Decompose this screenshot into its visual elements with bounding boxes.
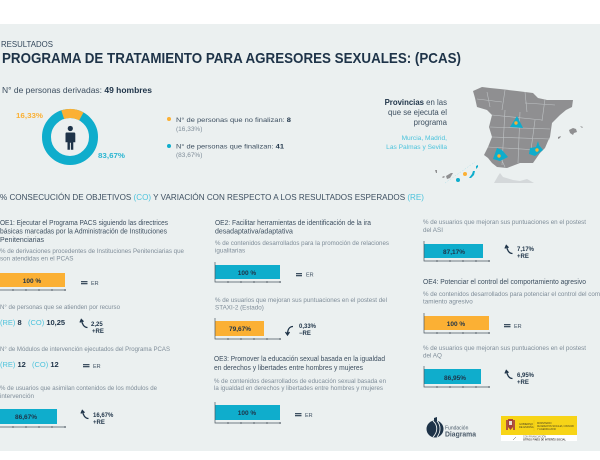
logo: Gobierno de España: OTROS FINES DE INTERÉS SOCIAL bbox=[523, 436, 566, 442]
status: equals ER: ER bbox=[306, 272, 314, 278]
variation: +7.17% bbox=[505, 246, 535, 260]
indicator text: aggression control bbox=[423, 291, 600, 306]
variation: -0.33%: 0,33% bbox=[299, 324, 317, 330]
legend: N° de personas que no finalizan: 8 bbox=[176, 116, 291, 124]
legend bbox=[167, 116, 291, 159]
indicator text: assimilate contents: % de usuarios que asimilan contenidos de los módulos de bbox=[0, 385, 157, 392]
indicator text: sexual education: la igualdad en derechos y libertades entre hombres y mujeres bbox=[214, 385, 383, 392]
status: equals ER bbox=[83, 364, 101, 370]
values: RE 8, CO 10.25: (CO) bbox=[28, 318, 45, 327]
provinces text: programa bbox=[414, 118, 448, 127]
provinces text: Provincias en las bbox=[385, 98, 447, 107]
icon: person bbox=[65, 126, 75, 150]
indicator text: STAXI-2: % de usuarios que mejoran sus puntuaciones en el postest del bbox=[215, 297, 387, 304]
bar: derivations 100% bbox=[0, 273, 66, 291]
bar: assimilate 86.67% bbox=[0, 409, 66, 428]
provinces text: Murcia, Madrid, bbox=[402, 135, 447, 142]
values: RE 12, CO 12: (CO) bbox=[32, 360, 49, 369]
provinces text bbox=[385, 98, 448, 151]
mountain silhouette bbox=[494, 173, 534, 183]
variation: +7.17%: +RE bbox=[517, 254, 529, 260]
indicator text: assimilate contents bbox=[0, 385, 157, 400]
Canary islands bbox=[435, 162, 478, 183]
objective OE3 heading: en derechos y libertades entre hombres y mujeres bbox=[214, 365, 363, 372]
logo: Fundación Diagrama bbox=[426, 417, 476, 438]
logo: Gobierno de España: DE ESPAÑA bbox=[519, 424, 534, 429]
status: equals ER: ER bbox=[93, 364, 101, 370]
objective OE2 heading: OE2: Facilitar herramientas de identificación de la ira bbox=[215, 220, 371, 227]
bar: STAXI-2 79.67% bbox=[215, 318, 281, 340]
objective OE2 heading bbox=[215, 220, 371, 236]
indicator text: assimilate contents: intervención bbox=[0, 393, 34, 400]
variation: +2.25 bbox=[80, 320, 104, 335]
bar: equal relations 100% bbox=[215, 262, 281, 283]
variation: -0.33% bbox=[286, 324, 317, 337]
donut label: finishing: 83,67% bbox=[98, 153, 126, 160]
legend: (16,33%) bbox=[176, 126, 202, 133]
indicator text: ASI bbox=[423, 219, 586, 234]
values: RE 8, CO 10.25: 10,25 bbox=[46, 318, 65, 327]
bar: AQ 86.95%: 86,95% bbox=[444, 375, 466, 382]
indicator text: aggression control: % de contenidos desarrollados para potenciar el control del com bbox=[423, 291, 600, 298]
indicator text: modules executed: N° de Módulos de intervención ejecutados del Programa PCAS bbox=[0, 345, 170, 353]
bar: assimilate 86.67%: 86,67% bbox=[15, 414, 37, 421]
variation: +16.67%: +RE bbox=[93, 420, 105, 426]
variation: +2.25: +RE bbox=[92, 329, 104, 335]
variation: +6.95%: 6,95% bbox=[517, 373, 535, 379]
highlighted province: Murcia bbox=[529, 141, 543, 156]
provinces text: que se ejecuta el bbox=[388, 108, 447, 117]
provinces text: Las Palmas y Sevilla bbox=[386, 144, 447, 151]
indicator text: sexual education bbox=[214, 378, 386, 392]
bar: STAXI-2 79.67%: 79,67% bbox=[229, 326, 251, 333]
objective OE1 heading bbox=[0, 220, 168, 244]
values: RE 8, CO 10.25: (RE) 8 bbox=[0, 318, 22, 327]
bar: derivations 100%: 100 % bbox=[23, 278, 41, 285]
indicator text: AQ: % de usuarios que mejoran sus puntuaciones en el postest bbox=[423, 345, 586, 352]
panel: column 3 bbox=[423, 219, 600, 388]
status: equals ER: ER bbox=[305, 413, 313, 419]
logo: Gobierno de España: CON FINANCIACIÓN bbox=[523, 436, 546, 438]
referred people count: N° de personas derivadas: 49 hombres bbox=[2, 86, 153, 95]
logo: Fundación Diagrama: Fundación bbox=[445, 426, 469, 432]
variation: +16.67%: 16,67% bbox=[93, 413, 114, 419]
title: PROGRAMA DE TRATAMIENTO PARA AGRESORES SEXUALES: (PCAS) bbox=[2, 50, 461, 67]
objective OE1 heading: Penitenciarias bbox=[0, 237, 44, 244]
panel: column 1 bbox=[0, 220, 184, 428]
section label: RESULTADOS bbox=[1, 39, 53, 49]
variation: +16.67% bbox=[81, 410, 114, 426]
indicator text: ASI: del ASI bbox=[423, 227, 443, 234]
bar: AQ 86.95% bbox=[424, 366, 490, 388]
variation: +7.17%: 7,17% bbox=[517, 247, 535, 253]
legend: (83,67%) bbox=[176, 152, 202, 159]
values: RE 12, CO 12: 12 bbox=[50, 360, 59, 369]
indicator text: derivations bbox=[0, 248, 184, 262]
indicator text: equal relations bbox=[215, 240, 389, 254]
indicator text: STAXI-2 bbox=[215, 297, 387, 312]
logo: Gobierno de España: GOBIERNO bbox=[519, 422, 533, 426]
highlighted province: Madrid bbox=[510, 116, 523, 128]
indicator text: people per resource: N° de personas que se atienden por recurso bbox=[0, 303, 120, 311]
bar: equal relations 100%: 100 % bbox=[238, 270, 256, 277]
status: equals ER bbox=[504, 324, 522, 330]
donut chart bbox=[16, 113, 126, 160]
indicator text: derivations: % de derivaciones procedentes de Instituciones Penitenciarias que bbox=[0, 248, 184, 255]
bar: sexual education 100% bbox=[215, 402, 281, 424]
legend: N° de personas que finalizan: 41 bbox=[176, 142, 284, 150]
logo: Fundación Diagrama: Diagrama bbox=[445, 432, 476, 438]
indicator text: equal relations: igualitarias bbox=[215, 248, 245, 254]
objective OE3 heading: OE3: Promover la educación sexual basada en la igualdad bbox=[214, 356, 385, 363]
status: equals ER: ER bbox=[514, 324, 522, 330]
bar: ASI 87.17% bbox=[424, 241, 490, 262]
section heading: % CONSECUCIÓN DE OBJETIVOS (CO) Y VARIACIÓN CON RESPECTO A LOS RESULTADOS ESPERADOS (RE) bbox=[0, 192, 424, 202]
variation: -0.33%: −RE bbox=[299, 331, 311, 337]
indicator text: STAXI-2: STAXI-2 (Estado) bbox=[215, 304, 264, 312]
highlighted province: Sevilla bbox=[493, 148, 508, 161]
indicator text: AQ bbox=[423, 345, 586, 360]
indicator text: ASI: % de usuarios que mejoran sus puntuaciones en el postest bbox=[423, 219, 586, 226]
objective OE2 heading: desadaptativa/adaptativa bbox=[215, 228, 293, 236]
logo: Gobierno de España: DE DERECHOS SOCIALES, CONSUMO bbox=[537, 425, 574, 428]
variation: +6.95%: +RE bbox=[517, 380, 529, 386]
bar: sexual education 100%: 100 % bbox=[238, 410, 256, 417]
map of Spain bbox=[435, 87, 583, 183]
logo: Gobierno de España: Y AGENDA 2030 bbox=[537, 428, 556, 431]
objective OE3 heading bbox=[214, 356, 385, 372]
status: equals ER bbox=[81, 281, 99, 287]
indicator text: aggression control: tamiento agresivo bbox=[423, 298, 473, 306]
variation: +2.25: 2,25 bbox=[91, 322, 103, 328]
bar: aggression control 100% bbox=[424, 313, 490, 334]
variation: +6.95% bbox=[505, 370, 535, 386]
logo: Gobierno de España bbox=[501, 416, 577, 442]
bar: aggression control 100%: 100 % bbox=[447, 321, 465, 328]
icon: coat of arms bbox=[506, 419, 515, 430]
indicator text: sexual education: % de contenidos desarrollados de educación sexual basada en bbox=[214, 378, 386, 385]
status: equals ER bbox=[296, 272, 314, 278]
panel: column 2 bbox=[214, 220, 389, 424]
bar: ASI 87.17%: 87,17% bbox=[443, 249, 465, 256]
donut label: not finishing: 16,33% bbox=[16, 113, 44, 120]
Balearic islands bbox=[558, 126, 583, 139]
indicator text: derivations: son atendidas en el PCAS bbox=[0, 256, 74, 262]
objective OE4 heading: OE4: Potenciar el control del comportamiento agresivo bbox=[423, 279, 586, 286]
status: equals ER: ER bbox=[91, 281, 99, 287]
objective OE1 heading: OE1: Ejecutar el Programa PACS siguiendo las directrices bbox=[0, 220, 168, 227]
logo: Gobierno de España: MINISTERIO bbox=[537, 422, 552, 425]
indicator text: equal relations: % de contenidos desarrollados para la promoción de relaciones bbox=[215, 240, 389, 247]
indicator text: AQ: del AQ bbox=[423, 352, 442, 360]
values: RE 12, CO 12: (RE) 12 bbox=[0, 360, 26, 369]
objective OE1 heading: básicas marcadas por la Administración de Instituciones bbox=[0, 228, 167, 236]
status: equals ER bbox=[295, 413, 313, 419]
